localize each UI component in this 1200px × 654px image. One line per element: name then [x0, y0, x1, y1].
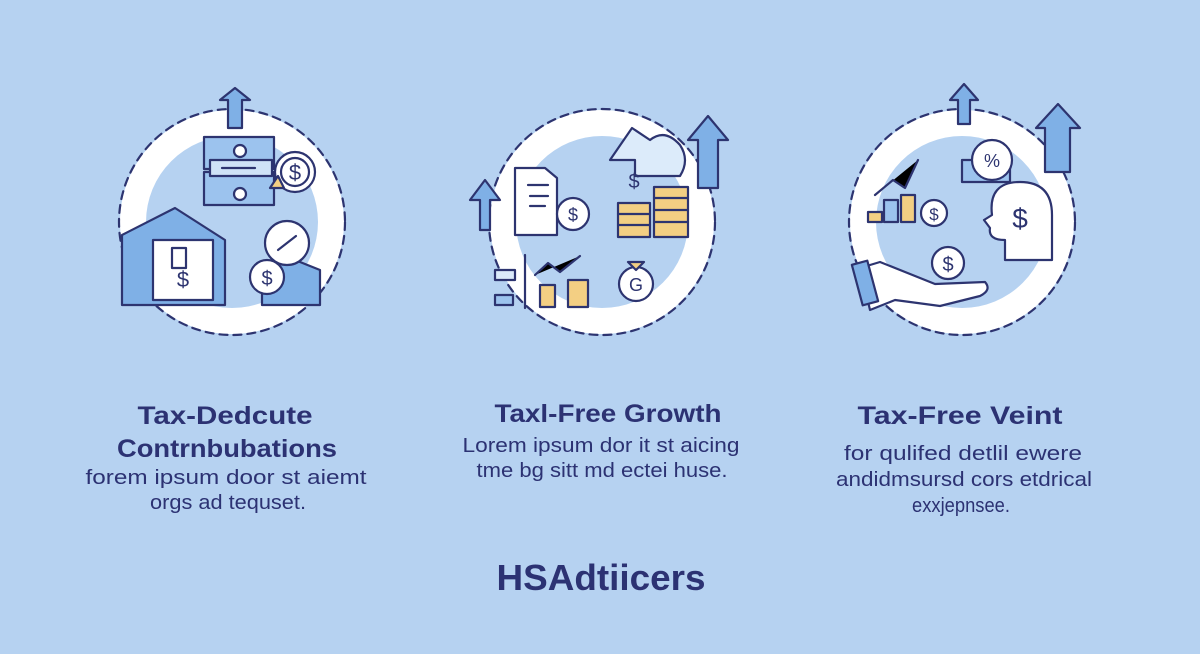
icon: coins and house	[250, 221, 320, 305]
icon: arrow right middle	[688, 116, 728, 188]
icon: cloud arrow dollar	[610, 128, 685, 193]
text: middle heading: Taxl-Free Growth	[494, 400, 722, 428]
icon: bar chart	[495, 255, 588, 308]
text: right body: andidmsursd cors etdrical	[836, 469, 1092, 491]
brand footer: HSAdtiicers	[496, 557, 706, 598]
icon: circle ring middle	[489, 109, 715, 335]
icon: arrow up left	[220, 88, 250, 128]
text: left heading: Tax-Dedcute	[138, 402, 313, 430]
text: left body	[86, 467, 367, 514]
panel: tax-free growth	[470, 109, 728, 335]
text: right body	[836, 443, 1092, 517]
icon: hand with coin	[852, 247, 988, 310]
icon: arrow left middle	[470, 180, 500, 230]
icon: money bag: G	[629, 275, 643, 295]
icon: percent coin stack: %	[984, 151, 1000, 171]
icon: circle ring left	[119, 109, 345, 335]
text: left body: forem ipsum door st aiemt	[86, 467, 367, 489]
icon: hand with coin: $	[942, 254, 954, 276]
panel: tax-free withdrawals	[849, 84, 1080, 335]
text: left heading	[117, 402, 337, 463]
icon: arrows up right	[950, 84, 1080, 172]
icon: head with dollar: $	[1012, 203, 1028, 234]
panel: tax-deductible contributions	[119, 88, 345, 335]
icon: banknotes	[204, 137, 274, 205]
icon: growth chart	[868, 160, 947, 226]
text: middle body: Lorem ipsum dor it st aicing	[462, 435, 740, 457]
icon: head with dollar	[984, 182, 1052, 260]
text: left body: orgs ad tequset.	[150, 492, 306, 514]
icon: house with tag	[122, 208, 225, 305]
text: middle body	[462, 435, 740, 482]
icon: gear coin: $	[289, 160, 301, 185]
icon: coins and house: $	[261, 268, 273, 290]
icon: coin stacks	[618, 187, 688, 237]
icon: circle ring right	[849, 109, 1075, 335]
icon: document with coin: $	[568, 205, 578, 225]
text: left heading: Contrnbubations	[117, 435, 337, 463]
text: middle body: tme bg sitt md ectei huse.	[476, 460, 728, 482]
icon: gear coin	[270, 152, 315, 192]
icon: cloud arrow dollar: $	[628, 171, 640, 193]
icon: house with tag: $	[177, 267, 189, 292]
text: right body: exxjepnsee.	[912, 495, 1010, 517]
text: right heading: Tax-Free Veint	[858, 402, 1063, 430]
icon: document with coin	[515, 168, 589, 235]
icon: growth chart: $	[929, 205, 939, 224]
text: right body: for qulifed detlil ewere	[844, 443, 1082, 465]
icon: money bag	[619, 262, 653, 301]
icon: percent coin stack	[962, 140, 1012, 182]
